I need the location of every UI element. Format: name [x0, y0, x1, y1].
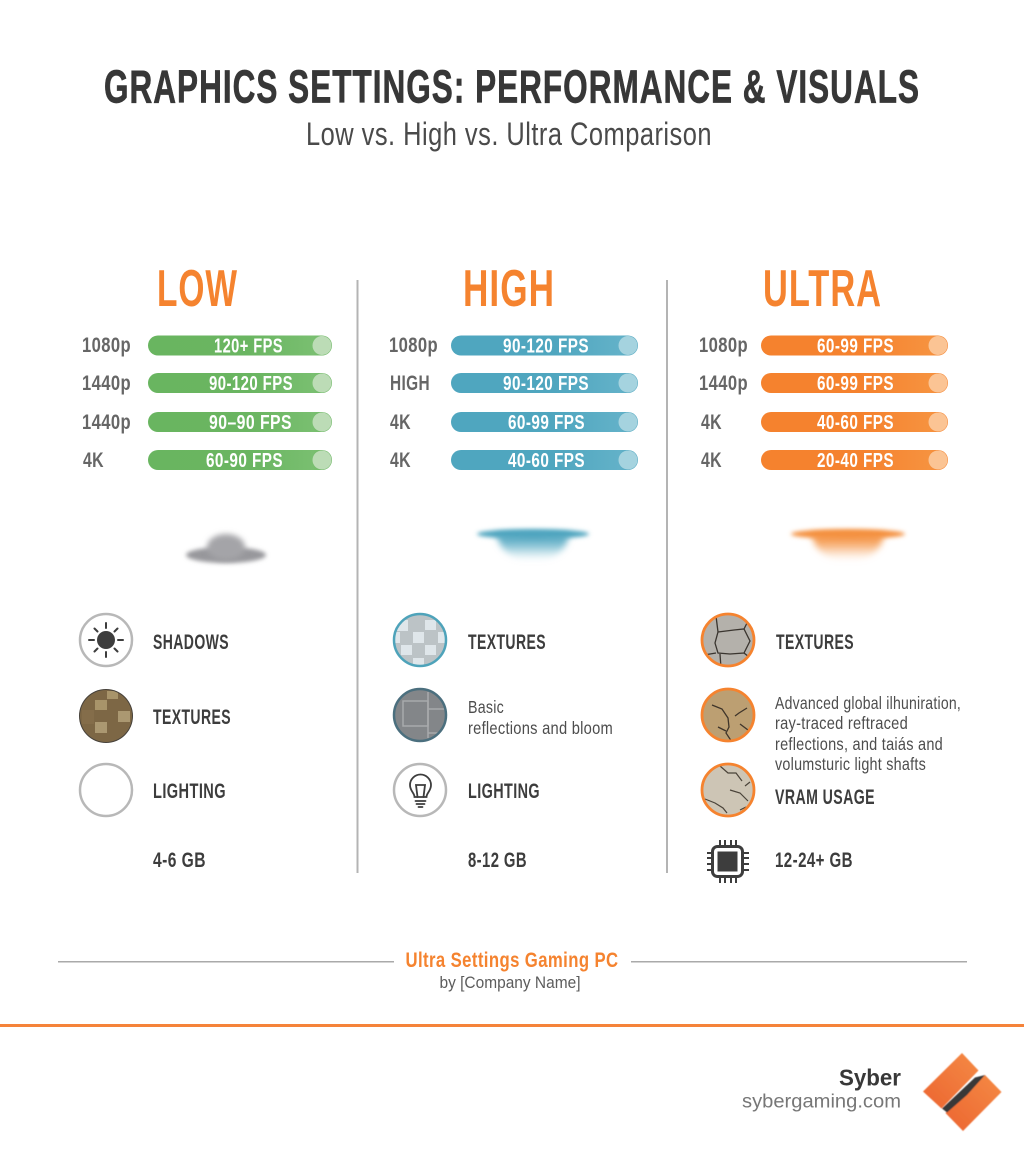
- panel: ultra: [699, 260, 961, 883]
- icon: memory chip: [707, 840, 749, 883]
- label: vram usage: VRAM USAGE: [775, 786, 875, 809]
- fps row: 4K 40-60: 40-60 FPS: [508, 449, 585, 472]
- fps row: 4K 20-40: [701, 449, 948, 472]
- fps row: 1440p 90-120: 90-120 FPS: [209, 372, 293, 395]
- fps row: 4K 20-40: 4K: [701, 449, 722, 472]
- label: lighting: LIGHTING: [153, 780, 226, 803]
- fps row: 1440p 90-120: 1440p: [82, 372, 131, 395]
- icon: light bulb: [394, 764, 446, 816]
- footer orange rule: [0, 1024, 1024, 1027]
- text: advanced lighting description: [775, 693, 961, 774]
- fps row: 1080p 120+: 1080p: [82, 334, 131, 357]
- label: textures: TEXTURES: [468, 631, 546, 654]
- fps row: 1440p 90-90: 1440p: [82, 411, 131, 434]
- label: textures: TEXTURES: [153, 706, 231, 729]
- icon: grey tile texture: [394, 689, 448, 741]
- vram: 12-24+ GB: 12-24+ GB: [775, 849, 853, 872]
- brand url: sybergaming.com: [742, 1092, 901, 1112]
- text: basic reflections and bloom: [468, 697, 613, 738]
- fps row: 1080p 60-99: 60-99 FPS: [817, 334, 894, 358]
- fps row: 4K 40-60: 40-60 FPS: [817, 411, 894, 434]
- text: advanced lighting description: reflections, and taiás and: [775, 734, 943, 754]
- fps row: HIGH 90-120: [390, 372, 638, 395]
- text: advanced lighting description: ray-traced reftraced: [775, 713, 908, 733]
- text: advanced lighting description: volumsturic light shafts: [775, 754, 926, 774]
- heading: ultra: ULTRA: [763, 260, 882, 318]
- fps row: 4K 60-99: 4K: [390, 411, 411, 434]
- visual: blue glow blob: [477, 529, 589, 560]
- fps row: 1440p 60-99: 60-99 FPS: [817, 372, 894, 395]
- fps row: 1080p 90-120: [389, 334, 638, 358]
- fps row: 1080p 60-99: 1080p: [699, 334, 748, 357]
- fps row: 1440p 90-90: [82, 411, 332, 434]
- caption rule: left: [58, 961, 394, 962]
- column divider: high and ultra: [666, 280, 668, 873]
- text: basic reflections and bloom: Basic: [468, 697, 504, 717]
- fps row: 4K 60-90: 4K: [83, 449, 104, 472]
- fps row: 4K 60-90: [83, 449, 332, 472]
- label: shadows: SHADOWS: [153, 631, 229, 654]
- vram: 4-6 GB: 4-6 GB: [153, 849, 206, 872]
- visual: grey shadow blob: [186, 534, 266, 563]
- fps row: 4K 40-60: 4K: [390, 449, 411, 472]
- fps row: HIGH 90-120: HIGH: [390, 372, 430, 395]
- caption rule: right: [631, 961, 967, 962]
- vram: 8-12 GB: 8-12 GB: [468, 849, 527, 872]
- fps row: 1080p 60-99: [699, 334, 948, 358]
- fps row: 1440p 60-99: 1440p: [699, 372, 748, 395]
- fps row: 4K 60-99: 60-99 FPS: [508, 411, 585, 434]
- fps row: 1440p 90-90: 90–90 FPS: [209, 411, 292, 434]
- icon: cracked grey texture: [702, 614, 754, 668]
- icon: pixelated texture: [78, 688, 134, 744]
- fps row: 1080p 90-120: 90-120 FPS: [503, 334, 589, 358]
- text: basic reflections and bloom: reflections and bloom: [468, 718, 613, 738]
- heading: low: LOW: [157, 260, 238, 318]
- caption: product name: Ultra Settings Gaming PC: [406, 949, 618, 972]
- icon: cracked sand texture: [702, 689, 754, 742]
- fps row: 1080p 90-120: 1080p: [389, 334, 438, 357]
- column divider: low and high: [356, 280, 358, 873]
- panel: low: [78, 260, 332, 872]
- fps row: 4K 40-60: [390, 449, 638, 472]
- fps row: 4K 60-99: [390, 411, 638, 434]
- icon: empty circle: [80, 764, 132, 816]
- label: textures: TEXTURES: [776, 631, 854, 654]
- fps row: 4K 40-60: [701, 411, 948, 434]
- icon: sun in circle: [80, 614, 132, 666]
- brand name: Syber: [839, 1064, 901, 1090]
- fps row: 1080p 120+: [82, 334, 332, 358]
- label: lighting: LIGHTING: [468, 780, 540, 803]
- subtitle: Low vs. High vs. Ultra Comparison: [306, 116, 712, 152]
- logo: [923, 1053, 1002, 1131]
- heading: high: HIGH: [463, 260, 555, 318]
- fps row: 4K 20-40: 20-40 FPS: [817, 449, 894, 472]
- fps row: 1080p 120+: 120+ FPS: [214, 334, 283, 358]
- caption: by company: by [Company Name]: [440, 973, 580, 992]
- icon: light checker texture: [394, 614, 446, 667]
- fps row: 1440p 90-120: [82, 372, 332, 395]
- fps row: 4K 60-90: 60-90 FPS: [206, 449, 283, 472]
- icon: cracked pale texture: [702, 764, 754, 816]
- fps row: 1440p 60-99: [699, 372, 948, 395]
- visual: orange glow blob: [791, 529, 905, 560]
- fps row: HIGH 90-120: 90-120 FPS: [503, 372, 589, 395]
- fps row: 4K 40-60: 4K: [701, 411, 722, 434]
- panel: high: [389, 260, 638, 872]
- text: advanced lighting description: Advanced global ilhuniration,: [775, 693, 961, 713]
